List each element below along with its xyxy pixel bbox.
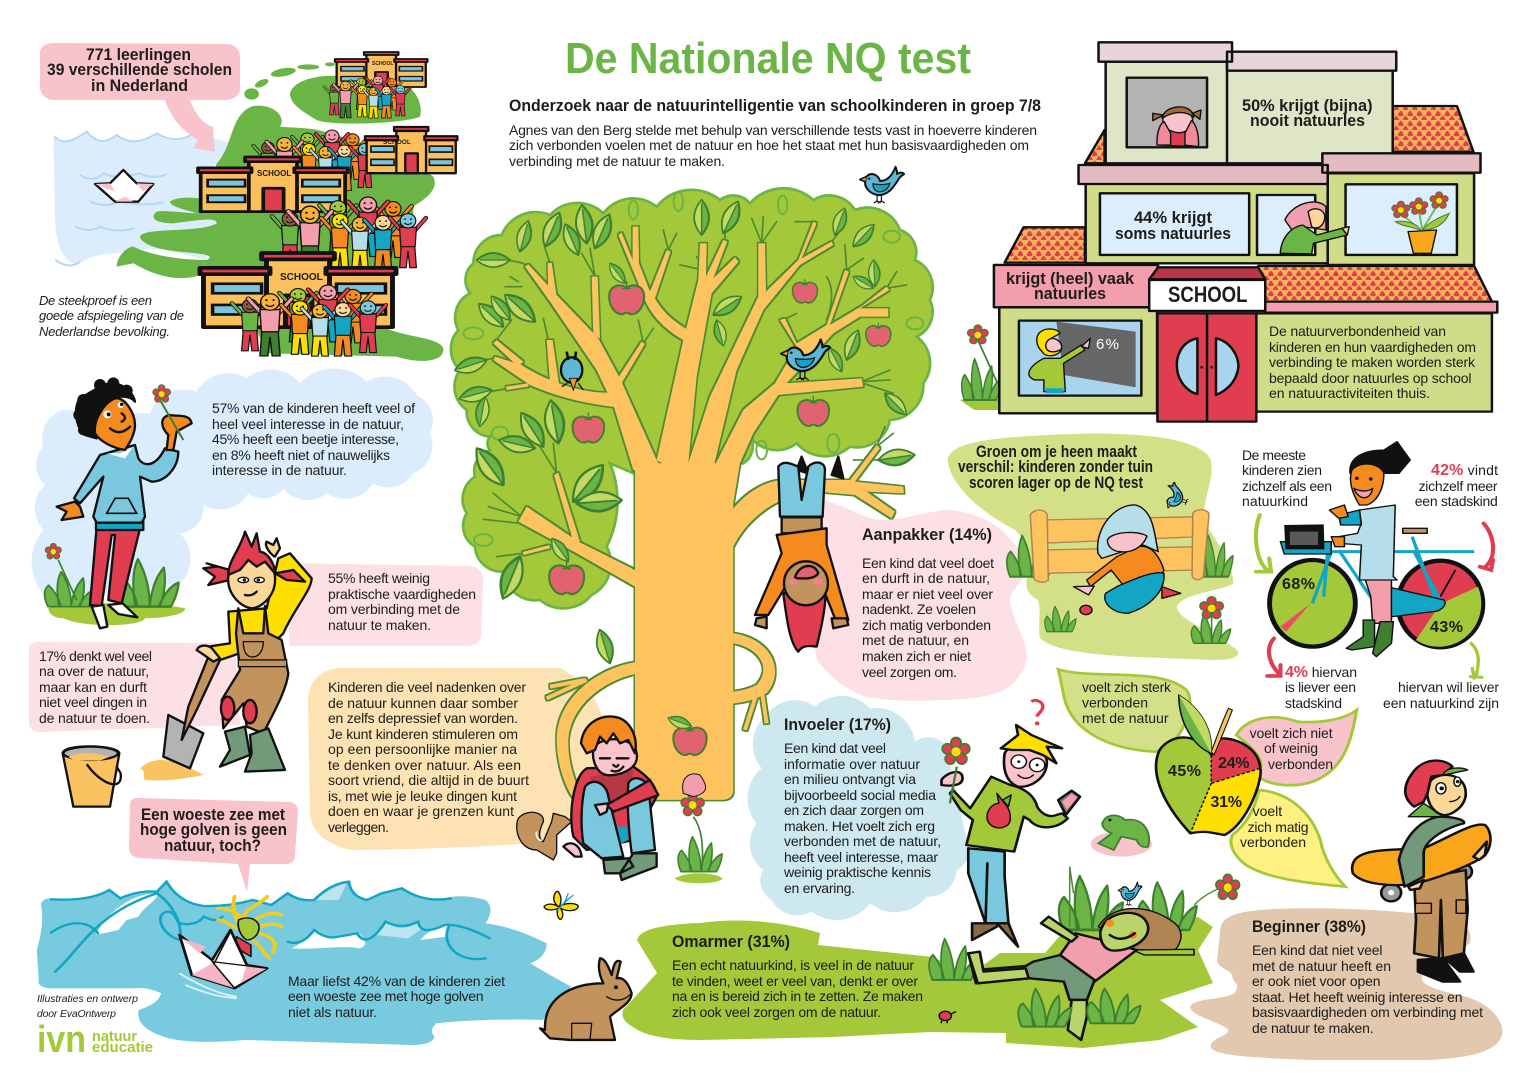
building labels: SCHOOL: [1168, 282, 1248, 307]
panel text: Invoeler: informatie over natuur: [784, 756, 920, 772]
labels on leaves: verbonden: [1082, 694, 1148, 710]
panel text: Aanpakker: maken zich er niet: [862, 648, 971, 664]
text: interest: heel veel interesse in de natuur,: [212, 416, 404, 432]
labels on leaves: [1082, 679, 1333, 850]
labels on leaves: voelt: [1253, 803, 1282, 819]
school 2: SCHOOL: [257, 169, 291, 178]
panel: 55 percent box: [283, 563, 483, 646]
building labels: 44% krijgt: [1134, 208, 1212, 227]
school 4 with crowd: [324, 52, 427, 118]
callout: pupils: 771 leerlingen: [86, 45, 191, 64]
water: [53, 132, 233, 265]
callout: pupils: 39 verschillende scholen: [47, 60, 232, 79]
panel text: Beginner: de natuur te maken.: [1252, 1020, 1374, 1036]
roofs: [1005, 106, 1492, 302]
yellow butterfly: [544, 891, 578, 919]
panel text: Kinderen die veel nadenken: doen en waar je grenzen kunt: [328, 803, 514, 819]
heading: Groen: scoren lager op de NQ test: [969, 473, 1143, 492]
callout: sea question: hoge golven is geen: [140, 820, 287, 839]
building labels: [1006, 96, 1372, 353]
panel text: Omarmer: te vinden, weet er veel van, denkt er over: [672, 973, 918, 989]
frame: [1312, 537, 1474, 603]
panel: 17 percent box: [29, 642, 240, 732]
bike texts: is liever een: [1285, 679, 1356, 695]
branches and trunk: [493, 222, 904, 800]
girl with shovel: [140, 532, 312, 780]
middle floor: [1086, 173, 1474, 265]
panel text: Invoeler: Invoeler (17%): [784, 715, 891, 734]
white crests: [96, 893, 449, 949]
sample note: [39, 293, 184, 339]
text: interest: 57% van de kinderen heeft veel of: [212, 400, 415, 416]
panel text: Aanpakker: nadenkt. Ze voelen: [862, 601, 976, 617]
panel: Beginner: [1190, 908, 1502, 1060]
text: 55 percent: om verbinding met de: [328, 601, 460, 617]
tree: [451, 167, 933, 800]
green land: [117, 62, 443, 361]
door: [1157, 313, 1256, 422]
bike texts: [1242, 447, 1499, 711]
building text: kinderen en hun vaardigheden om: [1269, 339, 1476, 355]
school 1: SCHOOL: [280, 272, 323, 283]
panel: Groen om je heen: [948, 433, 1238, 660]
school building: [994, 42, 1497, 422]
skateboard boy: [1352, 761, 1490, 982]
panel text: Aanpakker: [862, 525, 994, 680]
text: interest: en 8% heeft niet of nauwelijks: [212, 447, 390, 463]
panel: map of the Netherlands: [53, 52, 457, 361]
building labels: soms natuurles: [1115, 224, 1231, 243]
panel text: Kinderen die veel nadenken: soort vriend, die altijd in de buurt: [328, 772, 529, 788]
bike texts: een natuurkind zijn: [1383, 695, 1499, 711]
apples: [549, 279, 891, 755]
panel text: Omarmer: na en is bereid zich in te zetten. Ze maken: [672, 988, 923, 1004]
crowd front: [232, 285, 386, 356]
panel text: Omarmer: zich ook veel zorgen om de natuur.: [672, 1004, 881, 1020]
frog: [1091, 815, 1152, 857]
text: sea: een woeste zee met hoge golven: [288, 988, 484, 1004]
text: 17 percent: na over de natuur,: [39, 663, 149, 679]
callout: pupils: [40, 43, 240, 152]
bike texts: 4% hiervan: [1285, 664, 1357, 681]
labels on leaves: met de natuur: [1082, 710, 1169, 726]
building text: verbinding te maken worden sterk: [1269, 354, 1476, 370]
lying girl with grass: [929, 867, 1240, 1040]
ladybird: [939, 1011, 956, 1023]
labels on leaves: verbonden: [1268, 756, 1333, 772]
bike texts: 43%: [1430, 619, 1463, 636]
panel text: Kinderen die veel nadenken: Je kunt kinderen stimuleren om: [328, 726, 518, 742]
building labels: krijgt (heel) vaak: [1006, 269, 1135, 288]
grass: [45, 543, 185, 625]
heading: Groen: Groen om je heen maakt: [976, 442, 1137, 461]
panel text: Aanpakker: Aanpakker (14%): [862, 525, 992, 544]
hanging girl: [755, 457, 848, 652]
panel text: Beginner: er ook niet voor open: [1252, 973, 1381, 989]
subtitle: Onderzoek naar de natuurintelligentie van schoolkinderen in groep 7/8: [509, 97, 1041, 115]
labels on leaves: zich matig: [1248, 819, 1309, 835]
percent labels: [1168, 755, 1250, 811]
crown: [451, 188, 933, 608]
panel text: Beginner: Een kind dat niet veel: [1252, 942, 1382, 958]
leaf: moderate connection: [1231, 790, 1345, 887]
panel text: Aanpakker: Een kind dat veel doet: [862, 555, 994, 571]
panel text: Beginner: staat. Het heeft weinig interesse en: [1252, 989, 1462, 1005]
panel text: Aanpakker: en durft in de natuur,: [862, 570, 990, 586]
building labels: nooit natuurles: [1250, 111, 1365, 130]
panel text: Kinderen die veel nadenken: te denken over natuur. Als een: [328, 757, 521, 773]
logo: ivn natuur educatie: [37, 1019, 153, 1061]
panel text: Kinderen die veel nadenken: is, met wie je leuke dingen kunt: [328, 788, 517, 804]
sea: [37, 882, 571, 1045]
heading: Groen: [958, 442, 1153, 492]
bike texts: 68%: [1282, 576, 1315, 593]
building text: en natuuractiviteiten thuis.: [1269, 385, 1430, 401]
panel: Invoeler: [747, 696, 969, 920]
apple chart with leaf labels: [1058, 669, 1357, 887]
credits: [37, 993, 138, 1020]
logo: ivn natuur educatie: educatie: [92, 1039, 153, 1056]
text: 55 percent: 55% heeft weinig: [328, 570, 430, 586]
sample note: Nederlandse bevolking.: [39, 324, 170, 339]
grass by school: [960, 325, 1001, 410]
bike texts: kinderen zien: [1242, 462, 1322, 478]
sitting boy: [563, 716, 658, 880]
text: interest: [212, 400, 415, 478]
arrow: red to wheel: [1480, 523, 1493, 570]
sample note: De steekproef is een: [39, 293, 152, 308]
bike texts: stadskind: [1285, 695, 1342, 711]
twigs: [483, 217, 907, 557]
panel text: Kinderen die veel nadenken: de natuur kunnen daar somber: [328, 695, 518, 711]
girl at window: [1280, 202, 1349, 254]
panel text: Beginner: [1252, 917, 1483, 1036]
school 3: SCHOOL: [383, 139, 411, 146]
panel: nature interest boy: [32, 368, 433, 628]
arrow: green to wheel: [1256, 515, 1271, 572]
bike texts: hiervan wil liever: [1398, 679, 1499, 695]
panel text: Aanpakker: zich matig verbonden: [862, 617, 991, 633]
panel: Kinderen die veel nadenken: [308, 668, 610, 850]
leaves: [453, 199, 916, 665]
intro text: [509, 122, 1037, 169]
school 2: [198, 157, 348, 212]
panel text: Kinderen die veel nadenken: op een persoonlijke manier na: [328, 741, 517, 757]
callout: pupils: in Nederland: [91, 76, 188, 95]
text: 17 percent: de natuur te doen.: [39, 710, 150, 726]
labels on leaves: of weinig: [1264, 740, 1318, 756]
percent labels: 45%: [1168, 763, 1201, 780]
panel text: Invoeler: en milieu ontvangt via: [784, 771, 916, 787]
panel text: Beginner: Beginner (38%): [1252, 917, 1366, 936]
crowd middle upper: [253, 130, 380, 191]
text: 17 percent: 17% denkt wel veel: [39, 648, 152, 664]
percent labels: 24%: [1218, 755, 1250, 772]
panel text: Invoeler: Een kind dat veel: [784, 740, 886, 756]
paper boat with girl: [180, 897, 282, 998]
panel text: Invoeler: heeft veel interesse, maar: [784, 849, 938, 865]
building labels: natuurles: [1034, 284, 1106, 303]
panel text: Invoeler: en zich daar zorgen om: [784, 802, 924, 818]
text: 17 percent: [39, 648, 152, 726]
text: sea: [288, 973, 505, 1020]
text: 17 percent: maar kan en durft: [39, 679, 147, 695]
crowd middle: [272, 197, 426, 271]
text: 55 percent: [328, 570, 476, 633]
percent labels: 31%: [1210, 794, 1242, 811]
credits: Illustraties en ontwerp: [37, 993, 138, 1005]
panel text: Beginner: basisvaardigheden om verbinding met: [1252, 1004, 1483, 1020]
bike texts: De meeste: [1242, 447, 1306, 463]
credits: door EvaOntwerp: [37, 1008, 116, 1020]
bucket: [63, 746, 121, 807]
panel text: Invoeler: [783, 715, 941, 896]
ground floor: [994, 265, 1497, 313]
arrow: green down: [1470, 643, 1482, 678]
fence girl scene: [1007, 481, 1233, 643]
labels on leaves: verbonden: [1240, 834, 1306, 850]
intro text: zich verbonden voelen met de natuur en hoe het staat met hun basisvaardigheden om: [509, 137, 1029, 153]
callout: sea question: [129, 798, 298, 892]
text: 55 percent: praktische vaardigheden: [328, 586, 476, 602]
bike texts: zichzelf meer: [1419, 478, 1498, 494]
birds on the tree: [561, 167, 904, 390]
text: sea: niet als natuur.: [288, 1004, 377, 1020]
curly details: [463, 192, 923, 546]
blue cloud: [32, 368, 433, 600]
building labels: 6%: [1096, 336, 1119, 353]
panel text: Invoeler: en ervaring.: [784, 880, 855, 896]
bike texts: zichzelf als een: [1242, 478, 1332, 494]
labels on leaves: voelt zich niet: [1250, 725, 1333, 741]
heading: Groen: verschil: kinderen zonder tuin: [958, 457, 1153, 476]
labels on leaves: voelt zich sterk: [1082, 679, 1172, 695]
panel text: Kinderen die veel nadenken: [328, 679, 529, 835]
arrow: red down: [1267, 638, 1280, 676]
school 4 with crowd: SCHOOL: [372, 61, 393, 67]
teacher: [1029, 329, 1090, 393]
squirrel: [517, 812, 572, 860]
leaf: strong connection: [1058, 669, 1190, 752]
building text: bepaald door natuurles op school: [1269, 370, 1472, 386]
bike with girl chart: [1256, 442, 1493, 678]
title: De Nationale NQ test: [565, 34, 971, 83]
building text: De natuurverbondenheid van: [1269, 323, 1446, 339]
building labels: 50% krijgt (bijna): [1242, 96, 1372, 115]
panel: Aanpakker: [800, 500, 1027, 701]
panel text: Omarmer: Omarmer (31%): [672, 932, 790, 951]
panel text: Aanpakker: maar er niet veel over: [862, 586, 993, 602]
text: sea: Maar liefst 42% van de kinderen ziet: [288, 973, 505, 989]
panel text: Aanpakker: veel zorgen om.: [862, 664, 957, 680]
sample note: goede afspiegeling van de: [39, 308, 184, 323]
bike texts: natuurkind: [1242, 493, 1308, 509]
panel text: Invoeler: verbonden met de natuur,: [784, 833, 941, 849]
logo: ivn natuur educatie: ivn: [37, 1019, 86, 1061]
apple pie chart: [1156, 695, 1261, 835]
panel: Omarmer and meadow: [622, 917, 1213, 1048]
leaf: weak connection: [1236, 710, 1357, 785]
intro text: verbinding met de natuur te maken.: [509, 153, 725, 169]
bike texts: een stadskind: [1415, 493, 1498, 509]
panel text: Kinderen die veel nadenken: en zelfs depressief van worden.: [328, 710, 518, 726]
question boy: [941, 700, 1080, 947]
top floor: [1106, 62, 1393, 163]
panel text: Omarmer: [672, 932, 923, 1020]
flower pot: [1392, 192, 1449, 253]
text: 55 percent: natuur te maken.: [328, 617, 431, 633]
right wheel 43 percent: [1398, 561, 1483, 647]
text: interest: interesse in de natuur.: [212, 462, 347, 478]
panel text: Kinderen die veel nadenken: verleggen.: [328, 819, 389, 835]
rabbit: [540, 958, 632, 1040]
girl in window: [1153, 107, 1201, 147]
water waves: [55, 132, 193, 265]
bike texts: 42% vindt: [1431, 462, 1498, 479]
girl rider: [1329, 442, 1410, 657]
boy: [57, 377, 192, 628]
panel text: Aanpakker: met de natuur, en: [862, 632, 969, 648]
paper boat: [95, 170, 153, 202]
panel text: Omarmer: Een echt natuurkind, is veel in de natuur: [672, 957, 914, 973]
callout: sea question: Een woeste zee met: [141, 805, 285, 824]
panel text: Invoeler: bijvoorbeeld social media: [784, 787, 936, 803]
logo: ivn natuur educatie: natuur: [92, 1028, 137, 1045]
school 3: [365, 127, 457, 173]
school 1: [200, 253, 396, 327]
text: 17 percent: niet veel dingen in: [39, 694, 147, 710]
building text: [1269, 323, 1476, 401]
panel text: Invoeler: weinig praktische kennis: [783, 864, 931, 880]
left wheel 68 percent: [1270, 560, 1355, 647]
flower with butterfly: [675, 774, 723, 883]
panel text: Beginner: met de natuur heeft en: [1252, 958, 1391, 974]
panel text: Kinderen die veel nadenken: Kinderen die veel nadenken over: [328, 679, 526, 695]
intro text: Agnes van den Berg stelde met behulp van verschillende tests vast in hoeverre kinderen: [509, 122, 1037, 138]
panel text: Invoeler: maken. Het voelt zich erg: [784, 818, 935, 834]
callout: sea question: natuur, toch?: [164, 836, 261, 855]
text: interest: 45% heeft een beetje interesse,: [212, 431, 399, 447]
